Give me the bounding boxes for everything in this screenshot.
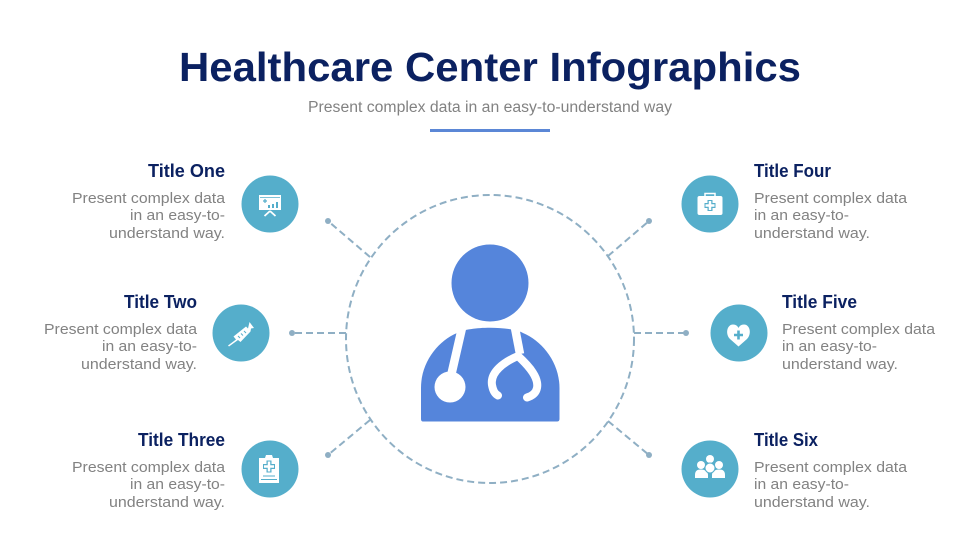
- panel: title two: Title Two: [124, 292, 197, 312]
- icon: doctor: [421, 244, 560, 422]
- panel: title five: Title Five: [782, 292, 857, 312]
- connector: title six: [608, 421, 652, 458]
- panel: title one: [72, 161, 298, 242]
- subtitle: Present complex data in an easy-to-understand way: [308, 99, 672, 116]
- panel: title three: Present complex data: [72, 460, 226, 476]
- panel: title one: in an easy-to-: [130, 208, 225, 224]
- panel: title five: understand way.: [782, 357, 898, 373]
- panel: title two: understand way.: [81, 357, 197, 373]
- panel: title six: Present complex data: [754, 460, 908, 476]
- panel: title three: understand way.: [109, 495, 225, 511]
- panel: title one: Title One: [148, 161, 225, 181]
- panel: title six: in an easy-to-: [754, 477, 849, 493]
- panel: title three: in an easy-to-: [130, 477, 225, 493]
- panel: title five: in an easy-to-: [782, 339, 877, 355]
- connector: title five: [634, 330, 689, 336]
- panel: title two: Present complex data: [44, 322, 198, 338]
- panel: title four: Title Four: [754, 161, 831, 181]
- panel: title four: Present complex data: [754, 191, 908, 207]
- panel: title three: Title Three: [138, 430, 225, 450]
- central dashed circle: [346, 195, 634, 483]
- connector: title two: [289, 330, 346, 336]
- panel: title one: understand way.: [109, 226, 225, 242]
- panel: title one: Present complex data: [72, 191, 226, 207]
- panel: title five: [710, 292, 936, 373]
- panel: title three: [72, 430, 298, 511]
- panel: title four: [682, 161, 908, 242]
- panel: title six: Title Six: [754, 430, 818, 450]
- panel: title five: Present complex data: [782, 322, 936, 338]
- panel: title six: understand way.: [754, 495, 870, 511]
- panel: title two: [44, 292, 270, 373]
- connector: title three: [325, 420, 370, 458]
- panel: title six: [682, 430, 908, 511]
- panel: title two: in an easy-to-: [102, 339, 197, 355]
- panel: title four: understand way.: [754, 226, 870, 242]
- title: Healthcare Center Infographics: [179, 44, 801, 90]
- panel: title four: in an easy-to-: [754, 208, 849, 224]
- title underline: [430, 129, 550, 132]
- connector: title one: [325, 218, 370, 257]
- connector: title four: [608, 218, 652, 256]
